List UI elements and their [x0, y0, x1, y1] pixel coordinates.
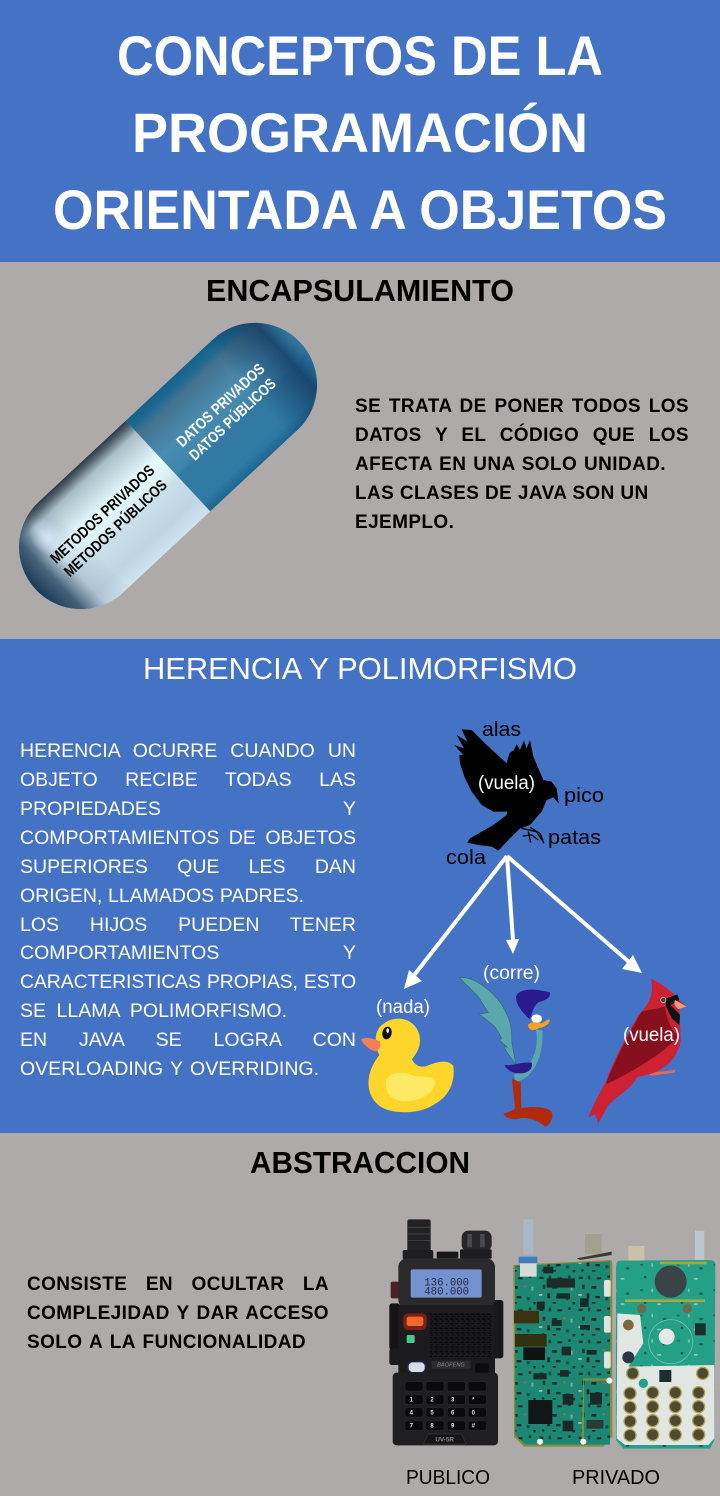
icon: assembled radio: 8 — [430, 1424, 434, 1430]
text block: herencia description: PROPIEDADES Y — [20, 798, 356, 820]
text block: herencia description: ORIGEN, LLAMADOS PADRES. — [20, 885, 304, 907]
text block: herencia description: LOS HIJOS PUEDEN TENER — [20, 914, 356, 936]
text block: encapsulamiento description: AFECTA EN UNA SOLO UNIDAD. — [355, 454, 666, 475]
child: duck — [361, 997, 454, 1112]
text block: herencia description: SE LLAMA POLIMORFISMO. — [20, 1000, 287, 1022]
text block: herencia description: SUPERIORES QUE LES DAN — [20, 856, 356, 878]
icon: assembled radio: UV-5R — [435, 1436, 454, 1443]
label: privado: PRIVADO — [572, 1467, 660, 1489]
section background: title band — [0, 0, 720, 262]
icon: assembled radio: 2 — [430, 1398, 434, 1404]
icon: assembled radio: 3 — [451, 1398, 455, 1404]
child: roadrunner — [459, 963, 552, 1127]
text block: herencia description — [20, 740, 356, 1080]
text block: herencia description: COMPORTAMIENTOS DE OBJETOS — [20, 827, 356, 849]
icon: assembled radio: # — [472, 1424, 476, 1430]
capsule label: datos: DATOS PÚBLICOS — [185, 375, 280, 464]
title: ORIENTADA A OBJETOS — [53, 178, 667, 241]
icon: assembled radio: BAOFENG — [437, 1363, 465, 1369]
text block: herencia description: OBJETO RECIBE TODAS LAS — [20, 769, 356, 791]
text block: herencia description: OVERLOADING Y OVERRIDING. — [20, 1058, 319, 1080]
arrows from parent to children — [404, 856, 642, 989]
section background: encapsulamiento — [0, 262, 720, 639]
heading: abstraccion: ABSTRACCION — [250, 1145, 470, 1180]
bird labels: patas — [548, 827, 601, 849]
behaviour label: cardinal: (vuela) — [623, 1025, 680, 1046]
icon: assembled radio: 9 — [451, 1424, 455, 1430]
text block: encapsulamiento description: EJEMPLO. — [355, 512, 454, 533]
text block: abstraccion description: CONSISTE EN OCULTAR LA — [27, 1274, 329, 1295]
bird labels — [446, 719, 604, 869]
title — [53, 24, 667, 241]
text block: abstraccion description: COMPLEJIDAD Y DAR ACCESO — [27, 1303, 329, 1324]
capsule illustration — [19, 322, 318, 610]
behaviour label: duck: (nada) — [376, 997, 430, 1018]
icon: black bird parent — [454, 729, 559, 851]
bird labels: cola — [446, 847, 487, 869]
child: cardinal — [589, 978, 687, 1123]
title: CONCEPTOS DE LA — [117, 24, 603, 87]
heading: herencia y polimorfismo: HERENCIA Y POLIMORFISMO — [143, 651, 577, 686]
capsule label: metodos: METODOS PÚBLICOS — [60, 476, 171, 581]
icon: radio circuit board, front — [513, 1219, 612, 1447]
icon: assembled radio — [389, 1219, 503, 1445]
icon: assembled radio: 4 — [410, 1410, 414, 1416]
icon: radio circuit board, back — [616, 1231, 715, 1449]
section background: herencia y polimorfismo — [0, 639, 720, 1133]
text block: encapsulamiento description: SE TRATA DE PONER TODOS LOS — [355, 396, 689, 417]
text block: herencia description: HERENCIA OCURRE CUANDO UN — [20, 740, 356, 762]
icon: assembled radio: 6 — [451, 1410, 455, 1416]
behaviour label: roadrunner: (corre) — [483, 963, 540, 984]
bird labels: alas — [482, 719, 521, 741]
text block: encapsulamiento description: LAS CLASES DE JAVA SON UN — [355, 483, 649, 504]
icon: assembled radio: * — [472, 1398, 475, 1404]
icon: assembled radio: 480.000 — [424, 1287, 469, 1299]
icon: assembled radio: 7 — [410, 1424, 414, 1430]
icon: assembled radio: 0 — [472, 1410, 476, 1416]
icon: assembled radio: 136.000 — [424, 1277, 469, 1289]
text block: encapsulamiento description — [355, 396, 689, 533]
bird labels: pico — [564, 785, 604, 807]
behaviour label: parent: (vuela) — [478, 773, 535, 794]
capsule label: metodos: METODOS PRIVADOS — [47, 462, 158, 567]
label: publico: PUBLICO — [406, 1467, 490, 1489]
text block: herencia description: EN JAVA SE LOGRA CON — [20, 1029, 356, 1051]
icon: assembled radio: 1 — [410, 1398, 414, 1404]
text block: encapsulamiento description: DATOS Y EL CÓDIGO QUE LOS — [355, 425, 689, 446]
heading: encapsulamiento: ENCAPSULAMIENTO — [206, 273, 514, 308]
text block: abstraccion description — [27, 1274, 329, 1353]
text block: herencia description: CARACTERISTICAS PROPIAS, ESTO — [20, 971, 356, 993]
title: PROGRAMACIÓN — [132, 101, 588, 164]
icon: assembled radio: 5 — [430, 1410, 434, 1416]
text block: abstraccion description: SOLO A LA FUNCIONALIDAD — [27, 1332, 306, 1353]
text block: herencia description: COMPORTAMIENTOS Y — [20, 942, 356, 964]
capsule label: datos: DATOS PRIVADOS — [173, 361, 268, 451]
section background: abstraccion — [0, 1133, 720, 1496]
